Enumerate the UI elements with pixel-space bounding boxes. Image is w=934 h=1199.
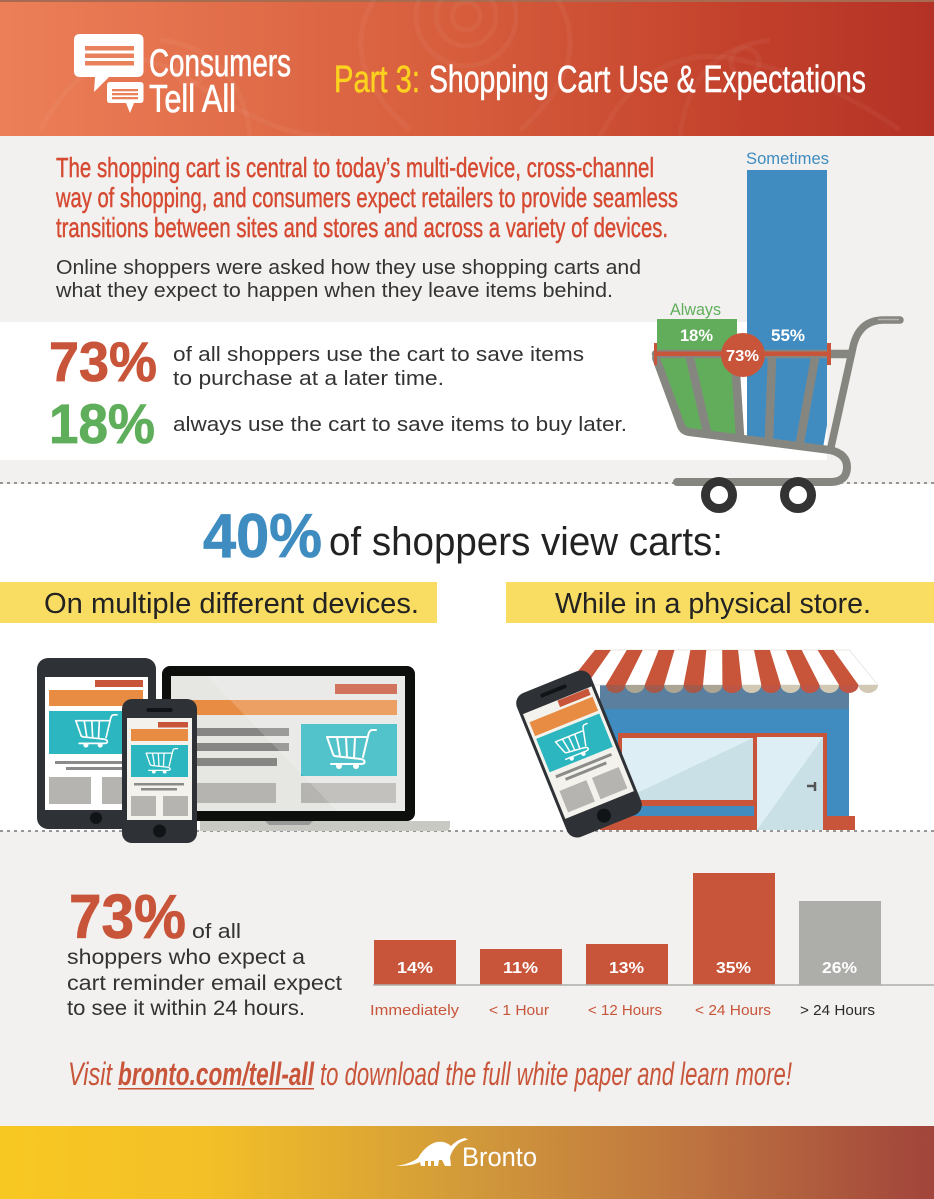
bar chart: reminder timing: < 1 Hour [489, 1002, 549, 1019]
intro lead text [55, 152, 678, 243]
stat: 73% save items: of all shoppers use the cart to save items [173, 344, 584, 366]
stat: 73% save items: to purchase at a later time. [173, 368, 444, 390]
bar chart: reminder timing: 26% [822, 960, 857, 977]
intro body text: Online shoppers were asked how they use shopping carts and [56, 257, 641, 279]
stat: 73% expect reminder: cart reminder email expect [67, 972, 342, 995]
heading: 40% of shoppers view carts [203, 502, 723, 571]
logo: Bronto [396, 1138, 537, 1172]
stat: 73% expect reminder: 73% [69, 883, 186, 952]
logo: Consumers Tell All: Consumers [149, 42, 291, 85]
banner: physical store [506, 582, 934, 623]
shopping cart bar chart: Sometimes [746, 149, 829, 168]
icon: tablet [37, 658, 156, 829]
heading: 40% of shoppers view carts: of shoppers view carts: [329, 520, 723, 564]
call to action [68, 1056, 792, 1092]
bar chart: reminder timing: > 24 Hours [800, 1002, 875, 1019]
bar chart: reminder timing: 11% [503, 960, 538, 977]
intro body text: what they expect to happen when they leave items behind. [55, 280, 613, 302]
illustration: store [513, 650, 878, 841]
icon: brontosaurus [396, 1138, 468, 1166]
stat: 18% always [49, 392, 627, 455]
logo: Consumers Tell All: Tell All [149, 78, 236, 121]
icon: laptop [162, 666, 450, 831]
divider [0, 830, 934, 832]
intro body text [55, 257, 641, 302]
stat: 73% expect reminder: shoppers who expect a [67, 946, 305, 969]
stat: 73% save items: 73% [49, 330, 157, 393]
call to action: Visit [68, 1056, 113, 1092]
divider [0, 482, 934, 484]
banner: physical store: While in a physical store. [555, 588, 871, 620]
stat: 73% expect reminder: to see it within 24 hours. [67, 997, 305, 1020]
shopping cart bar chart: 73% [726, 348, 759, 365]
icon: phone [122, 699, 197, 843]
bar chart: reminder timing: 35% [716, 960, 751, 977]
illustration: devices [37, 658, 450, 843]
logo: Consumers Tell All [74, 34, 291, 121]
shopping cart bar chart [654, 149, 900, 508]
bar chart: reminder timing: 13% [609, 960, 644, 977]
icon: tilted phone [513, 667, 645, 841]
bar chart: reminder timing: 14% [397, 960, 433, 977]
call to action: bronto.com/tell-all [118, 1056, 315, 1092]
footer band [0, 1126, 934, 1199]
intro lead text: The shopping cart is central to today’s multi-device, cross-channel [56, 152, 654, 183]
stat: 18% always: 18% [49, 392, 155, 455]
banner: multiple devices: On multiple different devices. [44, 588, 419, 620]
logo: Bronto: Bronto [462, 1142, 537, 1172]
shopping cart bar chart: 55% [771, 326, 805, 345]
banner: multiple devices [0, 582, 437, 623]
title: Part 3: [334, 59, 420, 101]
heading: 40% of shoppers view carts: 40% [203, 502, 322, 571]
stat: 73% save items [49, 330, 584, 393]
bar chart: reminder timing: Immediately [370, 1002, 460, 1019]
header banner [0, 0, 934, 136]
store building [600, 685, 855, 830]
stat: 18% always: always use the cart to save items to buy later. [173, 414, 627, 436]
bar chart: reminder timing [370, 873, 934, 1019]
stat: 73% expect reminder [67, 883, 342, 1020]
icon: speech bubbles [74, 34, 144, 113]
stat: 73% expect reminder: of all [192, 921, 241, 943]
shopping cart bar chart: 18% [680, 326, 713, 345]
shopping cart bar chart: Always [670, 300, 721, 319]
intro lead text: transitions between sites and stores and across a variety of devices. [56, 212, 668, 243]
store awning [567, 650, 878, 693]
bar chart: reminder timing: < 24 Hours [695, 1002, 771, 1019]
intro lead text: way of shopping, and consumers expect retailers to provide seamless [55, 182, 678, 213]
bar chart: reminder timing: < 12 Hours [588, 1002, 662, 1019]
